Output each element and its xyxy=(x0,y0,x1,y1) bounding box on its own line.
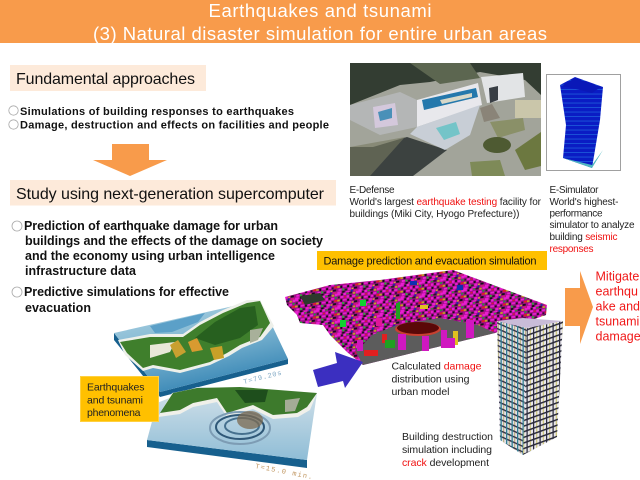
text block: study bullets: and the economy using urban intelligence xyxy=(25,249,275,263)
text block: fundamental approaches bullets: Damage, destruction and effects on facilities and people xyxy=(20,120,329,132)
text block: E-Simulator caption: performance xyxy=(550,208,603,220)
image: urban damage model xyxy=(285,270,547,365)
arrow: down xyxy=(93,144,167,176)
text block: E-Simulator caption xyxy=(550,185,635,255)
text block: building destruction simulation: simulation including xyxy=(402,444,492,456)
text block: calculated damage distribution xyxy=(392,360,482,398)
label: earthquakes and tsunami phenomena: Earthquakes xyxy=(87,382,144,394)
text block: fundamental approaches bullets: Simulations of building responses to earthquakes xyxy=(20,106,294,118)
text block: E-Simulator caption: World's highest- xyxy=(550,197,618,208)
text block: study bullets: evacuation xyxy=(25,301,91,315)
text block: mitigate damage: damage xyxy=(596,330,640,344)
text block: calculated damage distribution: urban model xyxy=(392,386,450,398)
text block: mitigate damage: earthqu xyxy=(596,284,638,298)
text block: study bullets: buildings and the effects of the damage on society xyxy=(25,234,323,248)
title xyxy=(93,0,547,44)
text block: E-Defense caption: E-Defense xyxy=(350,185,395,196)
text block: mitigate damage xyxy=(596,270,640,344)
image: tsunami map xyxy=(147,387,317,468)
label: damage prediction and evacuation simulation xyxy=(317,251,547,270)
header banner xyxy=(0,0,640,44)
heading: study using next-generation supercomputer: Study using next-generation supercomputer xyxy=(16,186,325,203)
text block: fundamental approaches bullets xyxy=(9,106,329,132)
text block: building destruction simulation xyxy=(402,431,493,469)
label: earthquakes and tsunami phenomena: phenomena xyxy=(87,407,141,419)
image: E-Defense facility xyxy=(350,63,541,176)
text block: E-Simulator caption: building seismic xyxy=(550,232,618,243)
text block: study bullets: Prediction of earthquake damage for urban xyxy=(24,219,278,233)
text block: E-Defense caption: buildings (Miki City, Hyogo Prefecture)) xyxy=(350,209,520,220)
text block: study bullets: Predictive simulations for effective xyxy=(24,285,229,299)
label: earthquakes and tsunami phenomena xyxy=(80,376,158,422)
text block: mitigate damage: Mitigate xyxy=(596,270,639,284)
text block: E-Defense caption xyxy=(350,185,542,220)
text block: E-Simulator caption: responses xyxy=(550,244,594,255)
text block: study bullets xyxy=(12,219,323,315)
image: building destruction model xyxy=(497,318,563,455)
icon: tsunami wave rings xyxy=(210,411,270,444)
image: E-Simulator building xyxy=(546,74,620,170)
text block: E-Simulator caption: simulator to analyze xyxy=(550,220,635,231)
text block: mitigate damage: ake and xyxy=(596,300,640,314)
text block: study bullets: infrastructure data xyxy=(25,264,137,278)
title: (3) Natural disaster simulation for entire urban areas xyxy=(93,23,547,44)
text block: mitigate damage: tsunami xyxy=(596,314,639,328)
text block: calculated damage distribution: distribution using xyxy=(392,374,470,386)
title: Earthquakes and tsunami xyxy=(208,0,432,21)
arrow: orange right xyxy=(565,271,593,344)
image: earthquake map xyxy=(114,300,288,397)
text block: E-Simulator caption: E-Simulator xyxy=(550,185,599,196)
text block: E-Defense caption: World's largest earthquake testing facility for xyxy=(350,197,542,208)
arrow: blue xyxy=(313,352,363,388)
text block: calculated damage distribution: Calculated damage xyxy=(392,360,482,372)
text block: building destruction simulation: crack development xyxy=(402,457,489,469)
heading: fundamental approaches: Fundamental approaches xyxy=(16,71,195,88)
label: earthquakes and tsunami phenomena: and tsunami xyxy=(87,394,143,406)
label: T=79.20s: T=79.20s xyxy=(243,370,283,387)
heading: fundamental approaches xyxy=(10,65,206,91)
text block: building destruction simulation: Building destruction xyxy=(402,431,493,443)
label: damage prediction and evacuation simulation: Damage prediction and evacuation simulation xyxy=(324,256,536,268)
heading: study using next-generation supercomputer xyxy=(10,180,336,206)
